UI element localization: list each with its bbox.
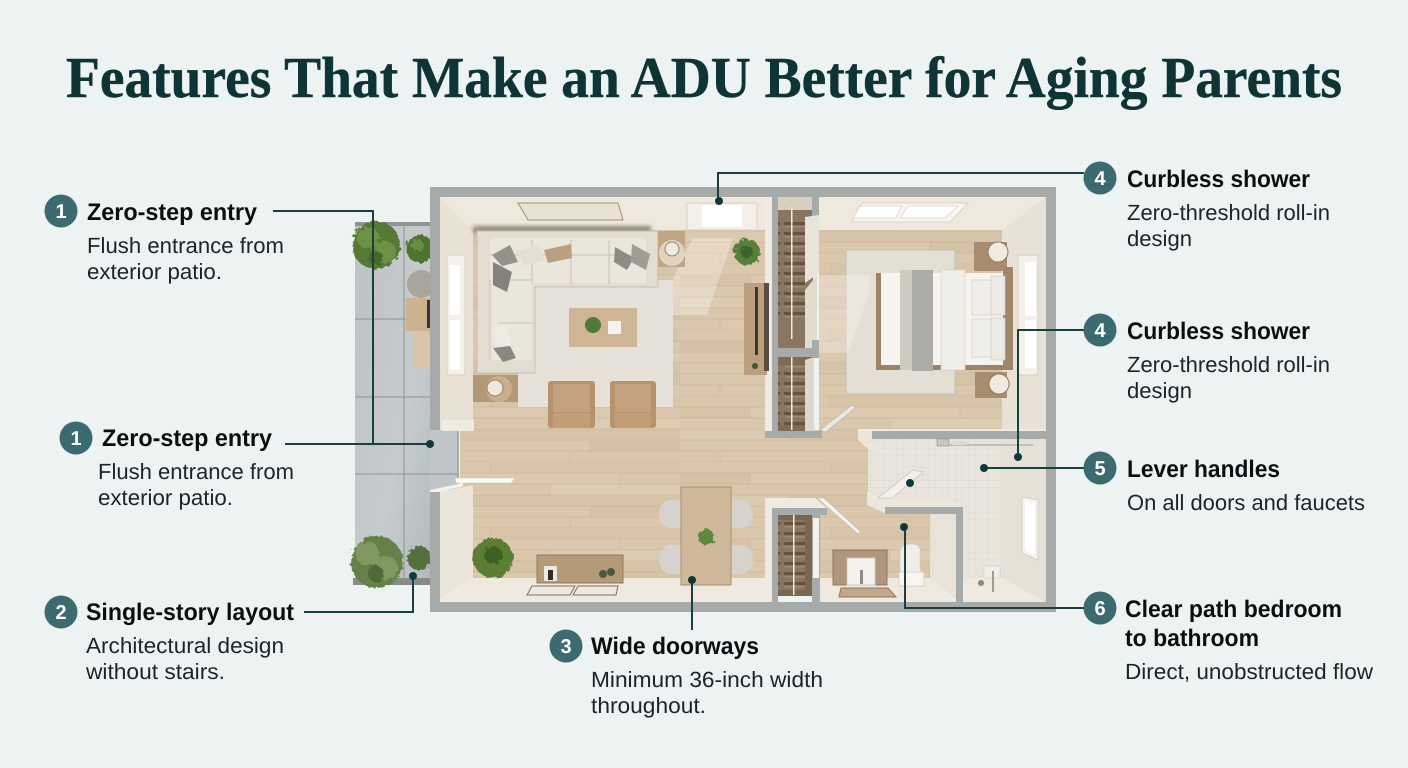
indoor plant: lower left (473, 538, 513, 578)
skylight window (852, 203, 968, 222)
patio (353, 222, 459, 585)
callout: zero-step entry, middle: Zero-step entry (102, 425, 273, 452)
anchor dots (409, 197, 1022, 584)
coffee table (569, 308, 637, 347)
callout: curbless shower, lower: Curbless shower (1127, 318, 1310, 345)
callout: single-story layout: 2 (55, 602, 67, 624)
callout: wide doorways: 3 (560, 636, 572, 658)
callout: single-story layout: Single-story layout (86, 599, 294, 626)
bedroom (819, 203, 1038, 398)
towel bar (937, 439, 1033, 446)
callout: zero-step entry, middle: 1 (70, 428, 82, 450)
entry door (687, 203, 757, 230)
tile shower floor (868, 438, 1002, 578)
floor mats (527, 586, 618, 595)
living room (447, 203, 769, 428)
sunlight on rug (819, 275, 870, 353)
callout: single-story layout: without stairs. (85, 659, 225, 684)
bathroom window (1022, 497, 1038, 560)
callout: curbless shower, top: 4 (1094, 168, 1106, 190)
callout: zero-step entry, top: exterior patio. (87, 259, 222, 284)
wall art (518, 203, 623, 220)
callout: clear path: 6 (1094, 598, 1106, 620)
callout: zero-step entry, top: Flush entrance from (87, 233, 284, 258)
hinged door (878, 470, 923, 498)
bedroom rug (846, 250, 955, 394)
title: Features That Make an ADU Better for Aging Parents (66, 45, 1342, 110)
sunlight on floor (673, 238, 733, 315)
callout: wide doorways: Minimum 36-inch width (591, 667, 823, 692)
media console (744, 283, 769, 375)
callout: clear path (1084, 592, 1373, 684)
callout: zero-step entry, top (44, 194, 284, 284)
callout: clear path: to bathroom (1125, 625, 1259, 652)
callout: curbless shower, top (1084, 162, 1330, 251)
callout: zero-step entry, top: Zero-step entry (87, 199, 258, 226)
toilet (899, 544, 924, 586)
exterior walls (430, 187, 1056, 612)
sectional sofa (477, 231, 658, 373)
callout: zero-step entry, top: 1 (55, 201, 67, 223)
callout: single-story layout (44, 596, 294, 684)
bathroom walls (858, 429, 1046, 602)
bathroom wall faces (820, 438, 1046, 602)
callout: zero-step entry, middle: exterior patio. (98, 485, 233, 510)
armchairs (548, 381, 656, 428)
callout: curbless shower, lower: 4 (1094, 320, 1106, 342)
vanity and sink (833, 550, 896, 597)
callout: curbless shower, lower (1084, 314, 1330, 403)
living room rug (518, 280, 673, 407)
entry door leaf (430, 478, 515, 492)
callout: curbless shower, top: Zero-threshold roll-in (1127, 200, 1330, 225)
interior wall faces (440, 197, 1046, 602)
callout: lever handles: Lever handles (1127, 456, 1280, 483)
table plant (698, 529, 714, 545)
callout: curbless shower, lower: Zero-threshold roll-in (1127, 352, 1330, 377)
indoor plant: corner (734, 239, 760, 265)
side tables with lamps (473, 231, 685, 402)
callout: single-story layout: Architectural design (86, 633, 284, 658)
callout: clear path: Clear path bedroom (1125, 596, 1342, 623)
callout: curbless shower, top: design (1127, 226, 1192, 251)
nightstands (974, 242, 1009, 398)
callout: curbless shower, top: Curbless shower (1127, 166, 1310, 193)
shower fixture (978, 566, 1000, 592)
leader lines (273, 173, 1084, 630)
callout: clear path: Direct, unobstructed flow (1125, 659, 1373, 684)
callout: lever handles: 5 (1094, 458, 1106, 480)
patio plants (351, 221, 434, 588)
dining table (681, 487, 731, 585)
bedroom window (1018, 255, 1038, 375)
dining area (473, 487, 753, 595)
closets (765, 187, 855, 602)
living room window (447, 255, 465, 375)
callout: lever handles (1084, 452, 1365, 515)
bed (876, 267, 1013, 371)
wood floors (460, 230, 1003, 579)
dining chairs (659, 500, 753, 574)
callout: lever handles: On all doors and faucets (1127, 490, 1365, 515)
bathroom (817, 429, 1046, 602)
bathroom door (817, 498, 861, 534)
callout: wide doorways: Wide doorways (591, 633, 759, 660)
callout: zero-step entry, middle: Flush entrance from (98, 459, 294, 484)
sideboard (537, 555, 623, 583)
callout: zero-step entry, middle (60, 422, 294, 510)
callout: wide doorways: throughout. (591, 693, 706, 718)
callout: wide doorways (550, 630, 823, 718)
floor plan (351, 187, 1056, 612)
callout: curbless shower, lower: design (1127, 378, 1192, 403)
